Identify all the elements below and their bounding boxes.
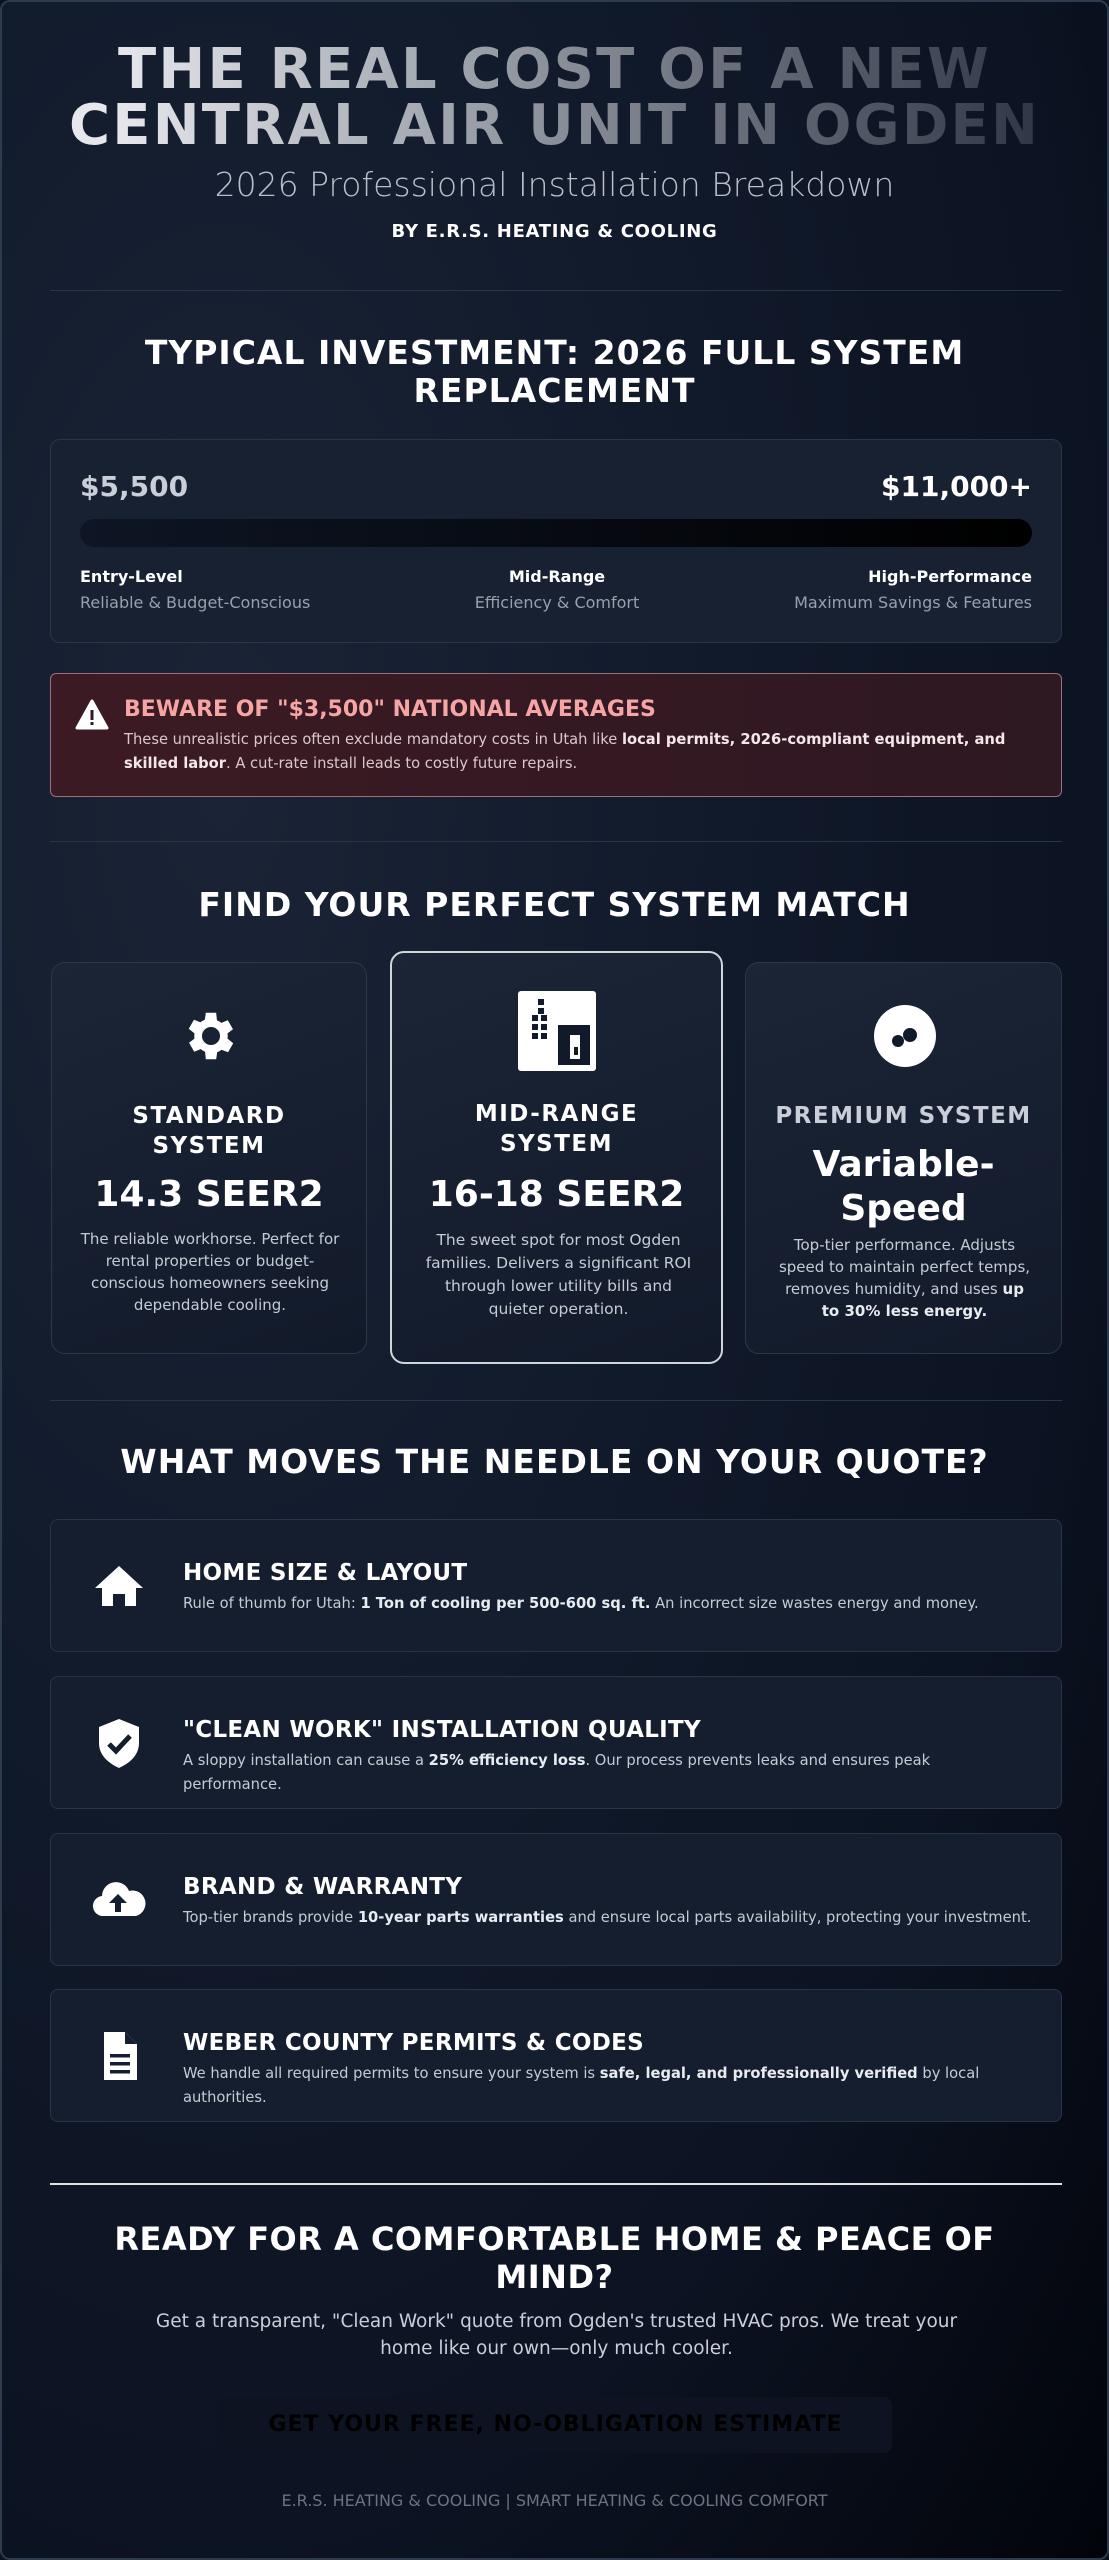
icon: shield <box>99 1719 139 1768</box>
factor: permits <box>50 1989 1062 2122</box>
card title: SYSTEM <box>152 1133 266 1159</box>
icon: warning <box>76 699 109 730</box>
heading: typical investment: REPLACEMENT <box>414 371 695 410</box>
factor title: HOME SIZE & LAYOUT <box>183 1560 467 1586</box>
card title: MID-RANGE <box>475 1101 638 1127</box>
panel: price range <box>50 439 1062 643</box>
subtitle: 2026 Professional Installation Breakdown <box>215 165 894 204</box>
card: standard <box>51 962 367 1354</box>
factor text: Rule of thumb for Utah: 1 Ton of cooling per 500-600 sq. ft. An incorrect size wastes energy and money. <box>183 1595 979 1612</box>
byline: BY E.R.S. HEATING & COOLING <box>392 221 717 242</box>
footer: E.R.S. HEATING & COOLING | SMART HEATING & COOLING COMFORT <box>281 2491 828 2510</box>
heading: cta: MIND? <box>495 2258 614 2296</box>
card title: STANDARD <box>132 1103 286 1129</box>
label: entry <box>80 567 310 612</box>
callout: beware <box>50 673 1062 797</box>
factor: brand <box>50 1833 1062 1966</box>
icon: circle <box>874 1005 936 1067</box>
rating: 14.3 SEER2 <box>94 1174 324 1215</box>
title: THE REAL COST OF A NEW <box>118 37 991 102</box>
label: entry: Entry-Level <box>80 567 183 586</box>
rating <box>812 1144 995 1229</box>
factor: home size <box>50 1519 1062 1652</box>
icon: building <box>518 991 596 1071</box>
label: mid: Efficiency & Comfort <box>475 593 639 612</box>
factor title: BRAND & WARRANTY <box>183 1874 462 1900</box>
factor text: We handle all required permits to ensure your system is safe, legal, and professionally verified by local authorities. <box>183 2065 979 2106</box>
label: mid <box>475 567 639 612</box>
factor title: "CLEAN WORK" INSTALLATION QUALITY <box>183 1717 701 1743</box>
factor: clean work <box>50 1676 1062 1809</box>
rating: Speed <box>840 1188 967 1229</box>
factor title: WEBER COUNTY PERMITS & CODES <box>183 2030 644 2056</box>
heading: cta <box>114 2220 995 2296</box>
card title <box>475 1101 638 1157</box>
card: premium <box>745 962 1062 1354</box>
card: mid-range <box>390 951 723 1364</box>
card title <box>132 1103 286 1159</box>
label: high: Maximum Savings & Features <box>794 593 1032 612</box>
callout text: These unrealistic prices often exclude mandatory costs in Utah like local permits, 2026-compliant equipment, and skilled labor. A cut-rate install leads to costly future repairs. <box>124 731 1005 772</box>
icon: document <box>104 2032 137 2080</box>
description: The sweet spot for most Ogden families. Delivers a significant ROI through lower utility bills and quieter operation. <box>426 1231 691 1318</box>
rating: 16-18 SEER2 <box>429 1174 684 1215</box>
price low: $5,500 <box>80 470 188 503</box>
heading: system match: FIND YOUR PERFECT SYSTEM MATCH <box>198 885 911 924</box>
title <box>2 42 1107 154</box>
heading: typical investment: TYPICAL INVESTMENT: 2026 FULL SYSTEM <box>145 333 964 372</box>
callout title: BEWARE OF "$3,500" NATIONAL AVERAGES <box>124 697 656 722</box>
factor text: Top-tier brands provide 10-year parts warranties and ensure local parts availability, protecting your investment. <box>183 1909 1031 1926</box>
heading: cta: READY FOR A COMFORTABLE HOME & PEACE OF <box>114 2220 995 2258</box>
price high: $11,000+ <box>881 470 1032 503</box>
button: GET YOUR FREE, NO-OBLIGATION ESTIMATE <box>268 2412 843 2437</box>
rating: Variable- <box>812 1144 995 1185</box>
description: Top-tier performance. Adjusts speed to maintain perfect temps, removes humidity, and uses up to 30% less energy. <box>779 1236 1030 1320</box>
label: entry: Reliable & Budget-Conscious <box>80 593 310 612</box>
button <box>219 2397 892 2453</box>
icon: house <box>95 1566 143 1606</box>
range bar <box>80 519 1032 547</box>
label: high <box>794 567 1032 612</box>
icon: gear <box>188 1012 234 1060</box>
label: mid: Mid-Range <box>509 567 605 586</box>
heading: typical investment <box>145 333 964 410</box>
card title: PREMIUM SYSTEM <box>775 1103 1032 1129</box>
icon: cloud upload <box>92 1882 146 1916</box>
factor text: A sloppy installation can cause a 25% efficiency loss. Our process prevents leaks and ensures peak performance. <box>183 1752 930 1793</box>
heading: needle: WHAT MOVES THE NEEDLE ON YOUR QUOTE? <box>120 1442 989 1481</box>
card title: SYSTEM <box>500 1131 613 1157</box>
description: The reliable workhorse. Perfect for rental properties or budget-conscious homeowners seeking dependable cooling. <box>81 1230 339 1314</box>
title: CENTRAL AIR UNIT IN OGDEN <box>69 93 1040 158</box>
cta text: Get a transparent, "Clean Work" quote from Ogden's trusted HVAC pros. We treat your home like our own—only much cooler. <box>156 2311 957 2359</box>
label: high: High-Performance <box>868 567 1032 586</box>
